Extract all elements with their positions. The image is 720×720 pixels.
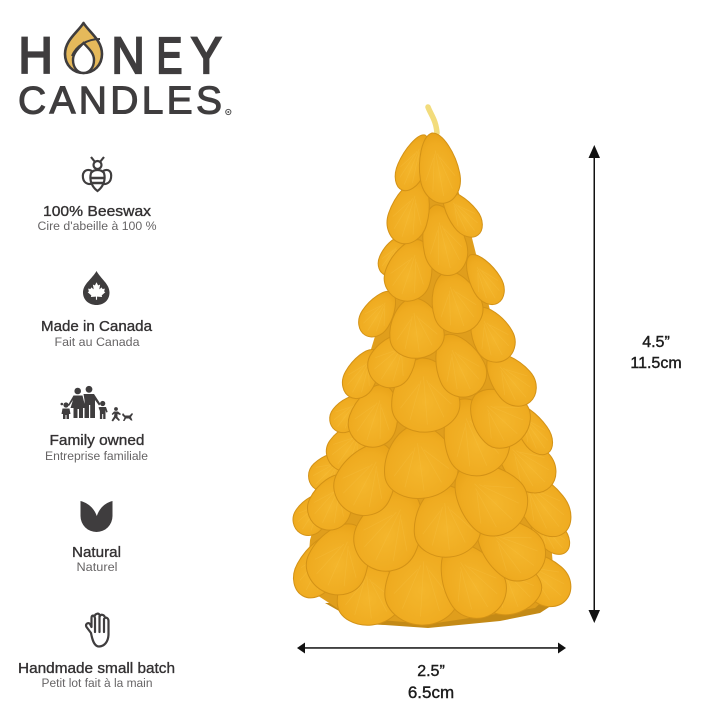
registered mark [226,109,231,115]
feature: 100% Beeswax [38,157,157,233]
icon: bee [83,157,111,191]
label: width [408,663,454,702]
heading: Made in Canada [41,318,153,335]
label: height [630,334,682,372]
heading: Family owned [50,432,144,449]
logo: Honey Candles [18,23,231,123]
icon: drop with maple leaf [83,271,110,305]
icon: tulip leaf [80,501,112,532]
subheading: Naturel [76,560,118,574]
wick [428,107,437,133]
tree body [306,140,555,624]
feature: Family owned [45,386,148,463]
label: height: 11.5cm [630,355,682,372]
feature: Made in Canada [41,271,153,349]
logo word: HONEY [18,27,222,85]
label: width: 2.5” [417,663,445,680]
logo word: CANDLES: CANDLES [18,80,222,123]
subheading: Entreprise familiale [45,449,148,463]
feature: Handmade small batch [18,614,175,690]
label: width: 6.5cm [408,683,454,702]
subheading: Petit lot fait à la main [42,676,153,690]
subheading: Fait au Canada [54,335,140,349]
logo word: HONEY: N [112,28,145,85]
base shadow [325,600,560,628]
heading: Natural [72,544,121,561]
heading: Handmade small batch [18,660,175,677]
logo icon: flame drop [65,23,102,73]
subheading: Cire d'abeille à 100 % [38,219,157,233]
label: height: 4.5” [642,334,670,351]
candle: beeswax tree [285,107,581,630]
logo word: HONEY: E [156,27,182,84]
logo word: HONEY: H [18,27,53,84]
arrow: height dimension [588,145,600,623]
heading: 100% Beeswax [43,203,152,220]
icon: family [60,386,133,422]
icon: hand [86,614,108,646]
tree petals [285,129,581,630]
logo word: HONEY: Y [191,28,222,85]
arrow: width dimension [297,642,566,654]
feature: Natural [72,501,121,574]
